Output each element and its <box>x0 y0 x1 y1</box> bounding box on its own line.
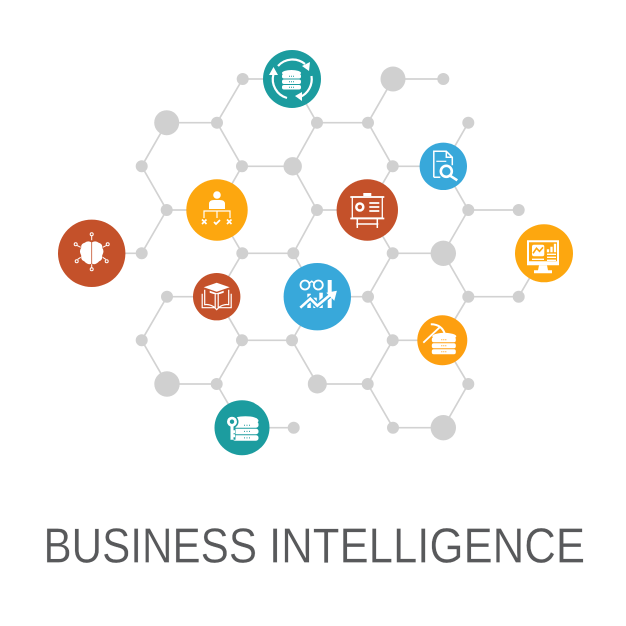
icon: presentation board <box>337 179 398 241</box>
title: BUSINESS <box>44 519 257 574</box>
icon: decision hierarchy <box>186 179 248 241</box>
icon: database sync <box>263 50 321 108</box>
title: INTELLIGENCE <box>269 519 585 574</box>
icon: report search <box>420 143 467 190</box>
icon: data mining pickaxe <box>417 315 467 365</box>
network nodes <box>136 66 525 440</box>
icon: brain network <box>58 220 125 287</box>
hexagon network connectors <box>92 79 544 428</box>
icon: analytics dashboard monitor <box>515 224 573 282</box>
title <box>44 519 585 574</box>
icon: database key <box>214 400 270 455</box>
icon: education book <box>193 273 240 320</box>
icon: business analytics chart <box>284 263 351 330</box>
